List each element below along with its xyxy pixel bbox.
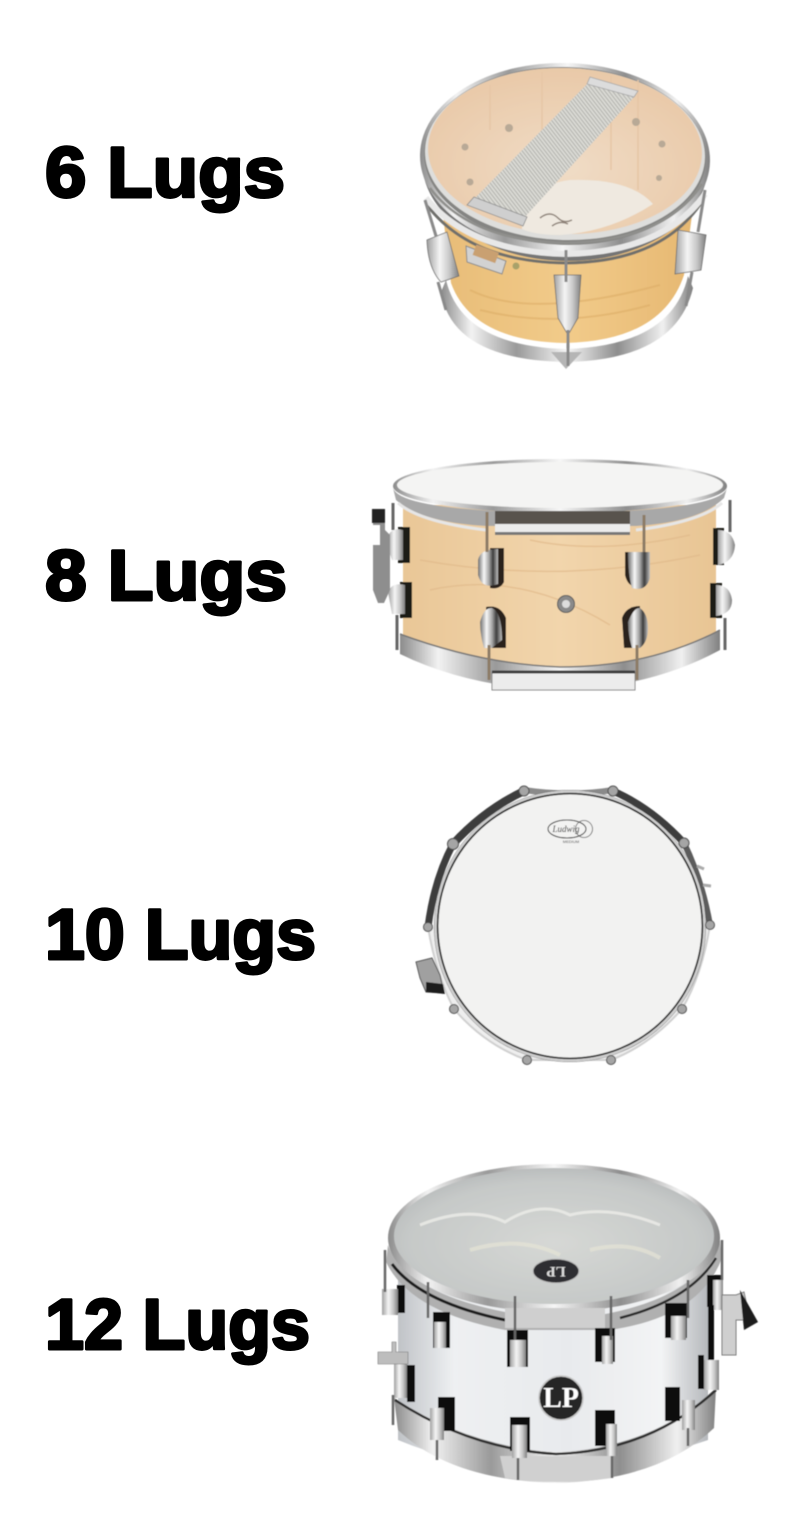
snare strainer <box>373 509 390 603</box>
inner lug screws <box>462 110 666 186</box>
front lugs: chrome <box>478 549 650 648</box>
front lugs: shadows <box>486 548 640 648</box>
head logo: MEDIUM <box>563 839 579 844</box>
strainer <box>466 246 506 274</box>
tension rods <box>425 190 705 366</box>
drum photo: 6 lugs, open shell with snare wires <box>418 59 712 369</box>
side lugs <box>398 527 724 618</box>
LP badge inside <box>533 1259 579 1283</box>
snare strainer <box>722 1292 750 1355</box>
lower lugs: chrome blocks <box>394 1360 719 1458</box>
label: 8 Lugs: 8 Lugs <box>45 537 287 616</box>
lower lugs: black mounts <box>407 1355 704 1451</box>
lower claws <box>428 925 710 1060</box>
LP badge front: LP <box>543 1383 579 1414</box>
tension rods <box>487 512 644 680</box>
upper lugs: black mounts <box>397 1275 721 1367</box>
bottom hoop <box>441 276 693 362</box>
top hoop layers <box>419 61 711 265</box>
lugs <box>427 230 706 335</box>
strainer <box>416 958 444 993</box>
front rim bands <box>427 200 703 263</box>
center hoop reflection <box>495 511 630 524</box>
bottom hoop <box>394 1388 716 1483</box>
top hoop <box>386 1240 722 1330</box>
upper claws <box>428 790 710 927</box>
translucent head <box>394 1168 714 1304</box>
steel shell <box>398 1280 708 1470</box>
rim <box>434 790 706 1062</box>
head logo <box>548 820 592 844</box>
side rods <box>697 866 711 886</box>
shell <box>403 505 716 670</box>
vent grommet <box>558 596 574 612</box>
label: 12 Lugs: 12 Lugs <box>45 1286 310 1365</box>
drum interior <box>426 64 704 238</box>
label: 10 Lugs: 10 Lugs <box>45 896 316 975</box>
head <box>438 794 702 1058</box>
label: 6 Lugs: 6 Lugs <box>45 134 285 213</box>
bottom hoop <box>400 630 720 690</box>
tension rods <box>385 1240 722 1480</box>
drum photo: 8 lugs, maple side view <box>372 459 735 690</box>
tension bolts <box>424 786 714 1064</box>
head logo: Ludwig <box>551 824 580 834</box>
snare wires <box>473 80 636 218</box>
top hoop <box>393 459 727 513</box>
butt plate <box>378 1342 408 1364</box>
drum photo: 12 lugs, LP steel snare <box>378 1164 758 1483</box>
drum photo: 10 lugs, top view <box>416 786 714 1064</box>
batter head <box>397 462 723 508</box>
LP badge inside: LP <box>546 1263 566 1279</box>
LP badge front <box>539 1376 583 1420</box>
drum shell: maple wrap <box>443 215 692 343</box>
bottom head visible inside <box>522 180 653 235</box>
upper lugs: chrome blocks <box>382 1280 723 1367</box>
